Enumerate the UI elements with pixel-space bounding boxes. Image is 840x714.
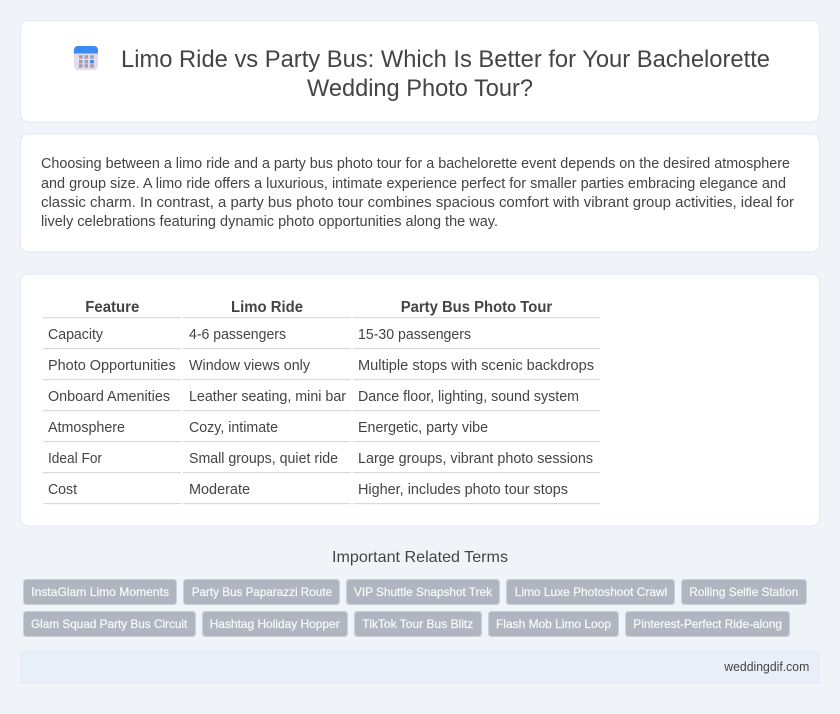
- text block: introduction paragraph: Choosing between a limo ride and a party bus photo tour for a bachelorette event depends on the desired atmosphere: [41, 156, 790, 172]
- tag: [24, 612, 196, 636]
- table row: ideal for: Small groups, quiet ride: [189, 451, 338, 467]
- tag: Flash Mob Limo Loop: [496, 617, 611, 631]
- title: [121, 46, 770, 102]
- table row: capacity: Capacity: [48, 327, 104, 343]
- table row: atmosphere: Atmosphere: [48, 420, 125, 436]
- table row: ideal for: Ideal For: [48, 451, 102, 467]
- text block: introduction paragraph: lively celebrations featuring dynamic photo opportunities along the way.: [41, 214, 498, 230]
- table row: photo opportunities: Window views only: [189, 358, 311, 374]
- table row: onboard amenities: Leather seating, mini bar: [189, 389, 346, 405]
- text block: introduction paragraph: and group size. A limo ride offers a luxurious, intimate experience perfect for smaller parties embracing elegance and: [41, 176, 786, 192]
- table row: cost: Moderate: [189, 482, 250, 498]
- table header row: Party Bus Photo Tour: [401, 299, 552, 316]
- table row: atmosphere: Cozy, intimate: [189, 420, 278, 436]
- text block: introduction paragraph: classic charm. In contrast, a party bus photo tour combines spacious comfort with vibrant group activities, ideal for: [41, 195, 794, 211]
- tag: [488, 612, 618, 636]
- table row: cost: Cost: [48, 482, 77, 498]
- tag: Hashtag Holiday Hopper: [210, 617, 340, 631]
- tag: [682, 580, 806, 604]
- panel: title header: [20, 20, 820, 122]
- tag: [626, 612, 790, 636]
- table row: photo opportunities: Multiple stops with scenic backdrops: [358, 358, 594, 374]
- table header row: Feature: [85, 299, 139, 316]
- table row: ideal for: Large groups, vibrant photo sessions: [358, 451, 593, 467]
- table row: onboard amenities: Onboard Amenities: [48, 389, 170, 405]
- tag: VIP Shuttle Snapshot Trek: [354, 585, 493, 599]
- table row: cost: [43, 482, 600, 504]
- table row: photo opportunities: [43, 358, 600, 380]
- tag: [24, 580, 176, 604]
- heading: important related terms: Important Related Terms: [332, 549, 508, 566]
- footer site name: weddingdif.com: [723, 660, 809, 674]
- title: Limo Ride vs Party Bus: Which Is Better for Your Bachelorette: [121, 46, 770, 73]
- tag list: related terms: [24, 580, 806, 636]
- panel: introduction: [20, 134, 820, 252]
- tag: Rolling Selfie Station: [689, 585, 798, 599]
- table row: atmosphere: [43, 420, 600, 442]
- table row: atmosphere: Energetic, party vibe: [358, 420, 488, 436]
- title: Wedding Photo Tour?: [307, 75, 533, 102]
- table row: cost: Higher, includes photo tour stops: [358, 482, 568, 498]
- tag: Limo Luxe Photoshoot Crawl: [515, 585, 667, 599]
- table row: onboard amenities: Dance floor, lighting, sound system: [358, 389, 579, 405]
- tag: TikTok Tour Bus Blitz: [362, 617, 473, 631]
- tag: [506, 580, 674, 604]
- table row: photo opportunities: Photo Opportunities: [48, 358, 176, 374]
- tag: InstaGlam Limo Moments: [31, 585, 169, 599]
- tag: [202, 612, 348, 636]
- table row: onboard amenities: [43, 389, 600, 411]
- tag: Glam Squad Party Bus Circuit: [31, 617, 188, 631]
- table row: capacity: 4-6 passengers: [189, 327, 286, 343]
- tag: [354, 612, 482, 636]
- icon: calendar: [74, 46, 98, 70]
- footer bar: [20, 650, 820, 684]
- tag: [346, 580, 500, 604]
- tag: [184, 580, 340, 604]
- table header row: [43, 299, 600, 318]
- panel: comparison table: [20, 274, 820, 526]
- table row: ideal for: [43, 451, 600, 473]
- table row: capacity: [43, 327, 600, 349]
- table header row: Limo Ride: [231, 299, 303, 316]
- table row: capacity: 15-30 passengers: [358, 327, 471, 343]
- tag: Party Bus Paparazzi Route: [192, 585, 332, 599]
- tag: Pinterest-Perfect Ride-along: [633, 617, 782, 631]
- text block: introduction paragraph: [41, 156, 794, 230]
